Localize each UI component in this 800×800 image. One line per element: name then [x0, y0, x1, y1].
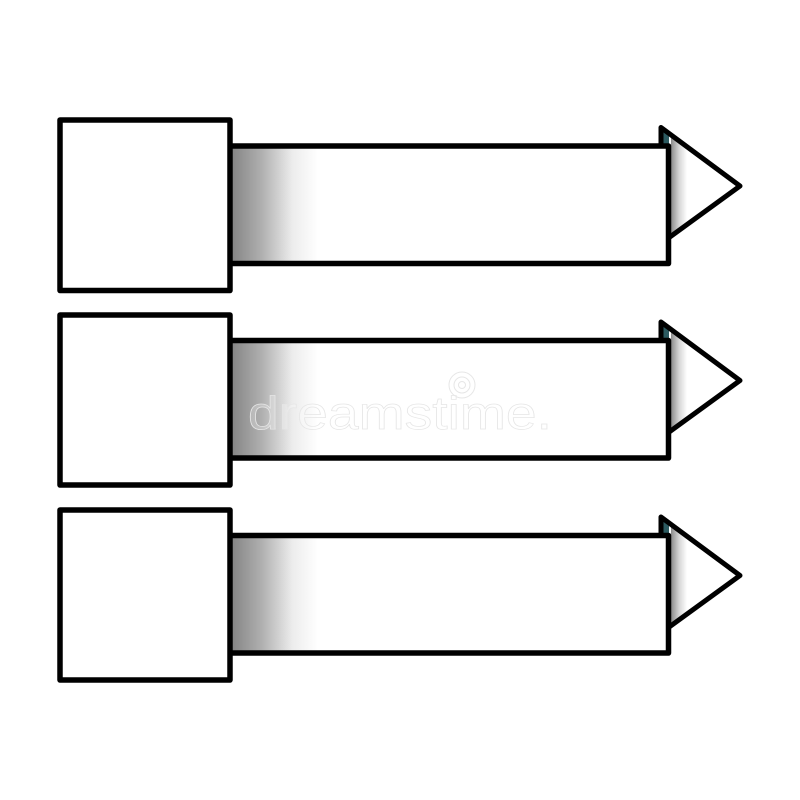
square box 2 [60, 315, 230, 485]
watermark text: dreamstime. [248, 387, 552, 439]
arrow head 2 [661, 322, 740, 432]
arrow row 2 [60, 315, 740, 485]
arrow bar 2 [232, 340, 668, 458]
arrow bar 3 [232, 536, 668, 653]
square box 3 [60, 510, 230, 680]
arrow bar 1 [232, 146, 668, 264]
square box 1 [60, 120, 230, 290]
arrow row 1 [60, 120, 740, 290]
arrow row 3 [60, 510, 740, 680]
watermark [248, 372, 552, 439]
arrow head 3 [661, 517, 740, 628]
arrow head 1 [661, 128, 740, 238]
watermark emblem [449, 372, 475, 398]
